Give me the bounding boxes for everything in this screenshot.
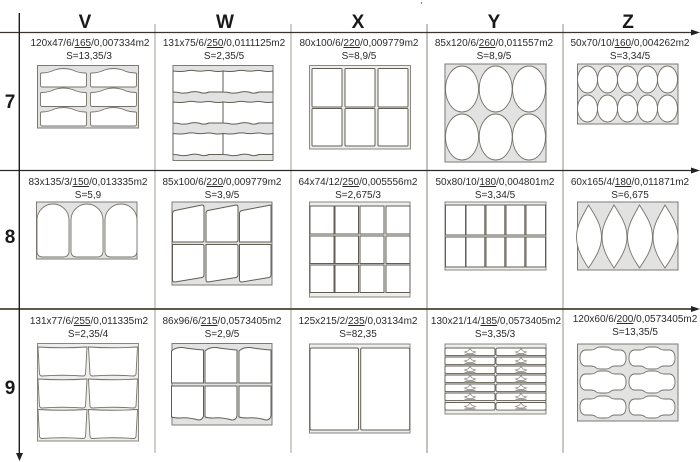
spec: W8: 85x100/6/220/0,009779m2 bbox=[162, 177, 282, 188]
column heading V: V bbox=[79, 12, 92, 33]
spec: Z9: 120x60/6/200/0,0573405m2 bbox=[573, 314, 698, 325]
spec: Z9 bbox=[573, 314, 698, 338]
sheet diagram: Y7 bbox=[445, 64, 546, 162]
spec: Z8: S=6,675 bbox=[611, 190, 649, 201]
spec: Y8: 50x80/10/180/0,004801m2 bbox=[435, 177, 555, 188]
spec: V9: 131x77/6/255/0,011335m2 bbox=[30, 316, 149, 327]
spec: Y7: S=8,9/5 bbox=[477, 51, 512, 62]
spec: V8: 83x135/3/150/0,013335m2 bbox=[28, 177, 148, 188]
sheet diagram: W8 bbox=[172, 202, 272, 285]
spec: W9: 86x96/6/215/0,0573405m2 bbox=[162, 316, 282, 327]
sheet diagram: X8 bbox=[310, 202, 410, 297]
column heading W: W bbox=[216, 12, 234, 33]
spec: Y9: S=3,35/3 bbox=[475, 329, 516, 340]
row heading 9: 9 bbox=[5, 378, 15, 399]
column heading Z: Z bbox=[622, 12, 634, 33]
spec: V9: S=2,35/4 bbox=[68, 329, 109, 340]
column heading X: X bbox=[352, 12, 365, 33]
spec: Y7 bbox=[435, 38, 554, 62]
spec: W8 bbox=[162, 177, 282, 201]
spec: V8: S=5,9 bbox=[75, 190, 102, 201]
spec: Z8 bbox=[571, 177, 690, 201]
spec: Z7 bbox=[570, 38, 690, 62]
spec: Z9: S=13,35/5 bbox=[612, 327, 658, 338]
spec: Z7: 50x70/10/160/0,004262m2 bbox=[570, 38, 690, 49]
sheet diagram: W7 bbox=[173, 66, 273, 160]
spec: X8 bbox=[298, 177, 418, 201]
spec: X9 bbox=[298, 316, 418, 340]
spec: Y9: 130x21/14/185/0,0573405m2 bbox=[431, 316, 561, 327]
sheet diagram: W9 bbox=[172, 344, 272, 425]
spec: W7 bbox=[163, 38, 286, 62]
spec: X7 bbox=[299, 38, 419, 62]
sheet diagram: V9 bbox=[38, 344, 138, 441]
spec: V7 bbox=[30, 38, 150, 62]
spec: W7: 131x75/6/250/0,0111125m2 bbox=[163, 38, 286, 49]
sheet diagram: Z9 bbox=[578, 344, 678, 421]
spec: Y9 bbox=[431, 316, 561, 340]
spec: Z7: S=3,34/5 bbox=[610, 51, 651, 62]
spec: Z8: 60x165/4/180/0,011871m2 bbox=[571, 177, 690, 188]
sheet diagram: V7 bbox=[38, 66, 138, 128]
spec: V7: S=13,35/3 bbox=[66, 51, 112, 62]
row heading 7: 7 bbox=[5, 92, 15, 113]
spec: X7: 80x100/6/220/0,009779m2 bbox=[299, 38, 419, 49]
spec: V8 bbox=[28, 177, 148, 201]
spec: Y8: S=3,34/5 bbox=[475, 190, 516, 201]
spec: X8: 64x74/12/250/0,005556m2 bbox=[298, 177, 418, 188]
spec: X7: S=8,9/5 bbox=[342, 51, 377, 62]
sheet diagram: Y9 bbox=[445, 344, 546, 414]
sheet diagram: Y8 bbox=[445, 202, 546, 270]
spec: Y8 bbox=[435, 177, 555, 201]
spec: X9: S=82,35 bbox=[339, 329, 377, 340]
spec: V7: 120x47/6/165/0,007334m2 bbox=[30, 38, 150, 49]
sheet diagram: Z7 bbox=[578, 64, 678, 124]
spec: Y7: 85x120/6/260/0,011557m2 bbox=[435, 38, 554, 49]
spec: V9 bbox=[30, 316, 149, 340]
row heading 8: 8 bbox=[5, 227, 15, 248]
spec: W7: S=2,35/5 bbox=[204, 51, 245, 62]
sheet diagram: Z8 bbox=[576, 202, 678, 270]
spec: W9 bbox=[162, 316, 282, 340]
sheet diagram: V8 bbox=[36, 202, 137, 259]
spec: W9: S=2,9/5 bbox=[205, 329, 240, 340]
sheet diagram: X9 bbox=[310, 344, 410, 433]
spec: X8: S=2,675/3 bbox=[335, 190, 381, 201]
spec: W8: S=3,9/5 bbox=[205, 190, 240, 201]
spec: X9: 125x215/2/235/0,03134m2 bbox=[298, 316, 418, 327]
sheet diagram: X7 bbox=[310, 66, 410, 149]
column heading Y: Y bbox=[488, 12, 501, 33]
